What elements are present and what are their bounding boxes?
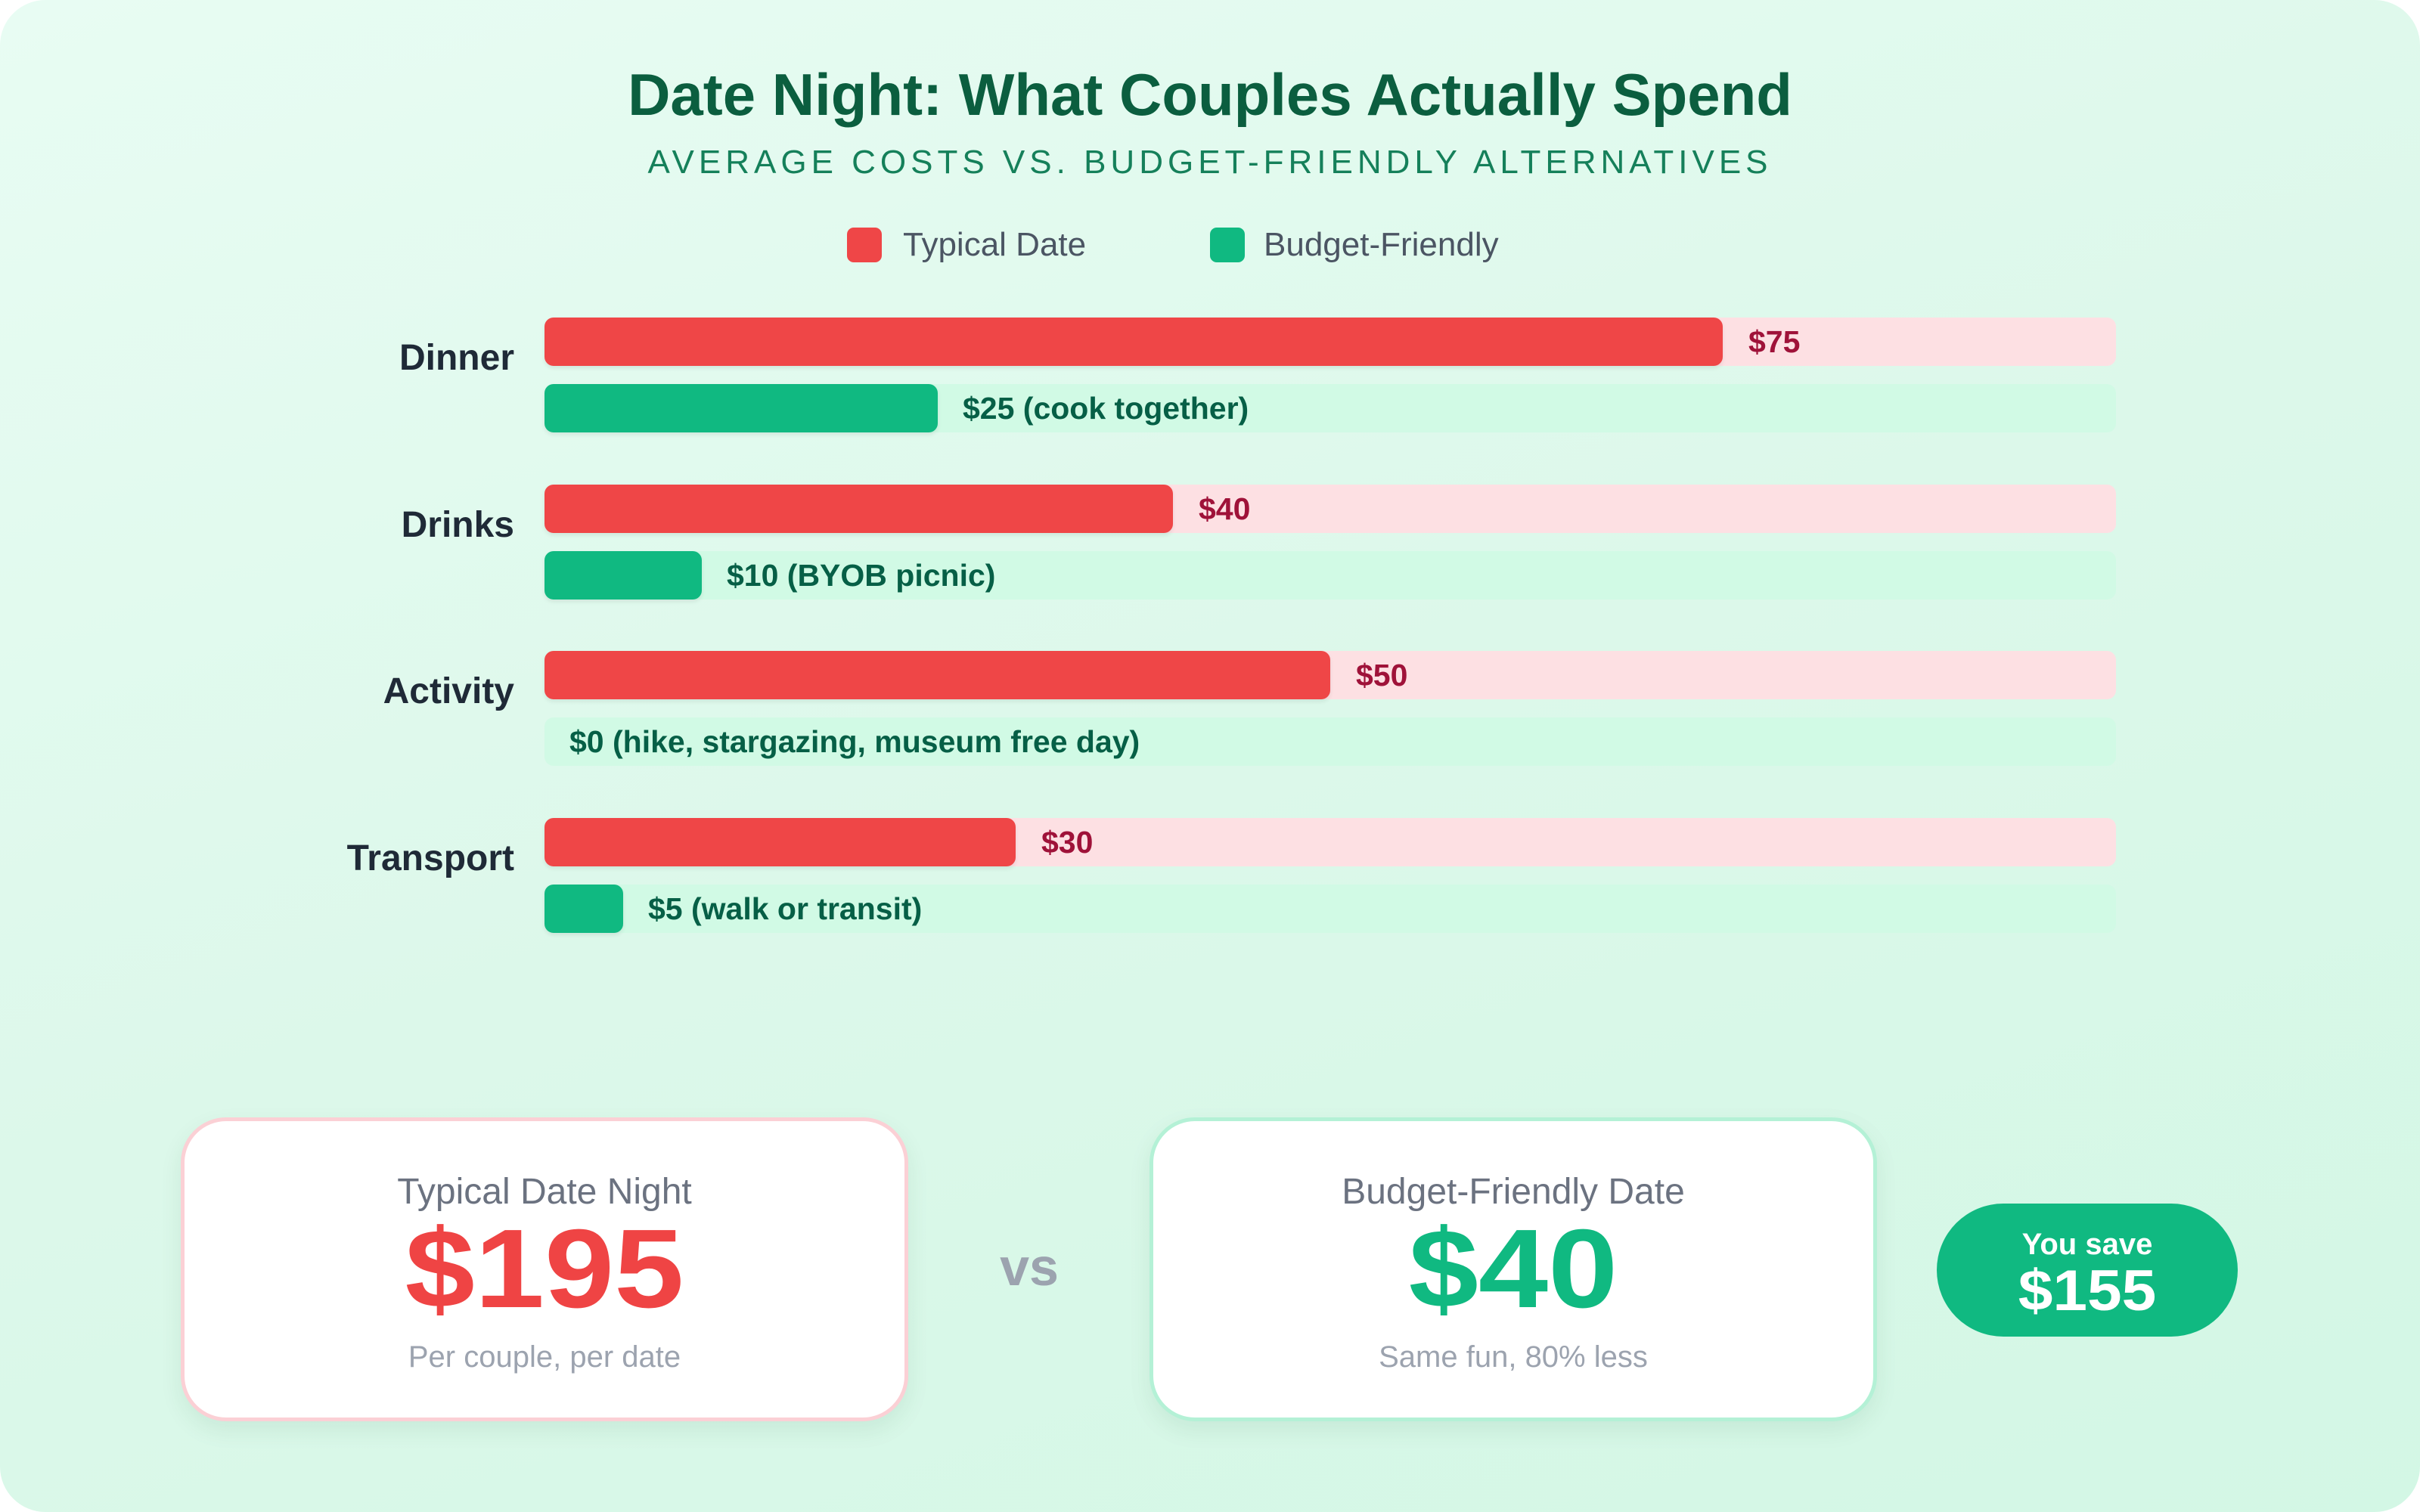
row: drinks: $10 (BYOB picnic) bbox=[727, 558, 995, 593]
row: transport: $5 (walk or transit) bbox=[648, 891, 922, 926]
card: typical date night: $195 bbox=[405, 1207, 684, 1331]
title: Date Night: What Couples Actually Spend bbox=[628, 61, 1792, 128]
legend bbox=[847, 226, 1499, 263]
row: dinner bbox=[399, 318, 2116, 435]
card: typical date night: Per couple, per date bbox=[408, 1340, 681, 1374]
savings pill: You save bbox=[2022, 1228, 2152, 1261]
row: dinner: $75 bbox=[1748, 324, 1800, 359]
row: drinks: $40 bbox=[1199, 491, 1250, 526]
card: typical date night bbox=[181, 1117, 908, 1421]
row: activity: $0 (hike, stargazing, museum free day) bbox=[569, 724, 1140, 759]
legend: budget: Budget-Friendly bbox=[1264, 226, 1499, 263]
legend: typical: Typical Date bbox=[903, 226, 1086, 263]
subtitle: AVERAGE COSTS VS. BUDGET-FRIENDLY ALTERNATIVES bbox=[647, 144, 1773, 181]
row: activity: Activity bbox=[383, 671, 514, 711]
card: budget-friendly date: $40 bbox=[1409, 1207, 1618, 1331]
row: drinks: Drinks bbox=[402, 505, 514, 545]
card: typical date night: Typical Date Night bbox=[397, 1172, 692, 1212]
savings pill: $155 bbox=[2018, 1259, 2156, 1323]
card: budget-friendly date: Same fun, 80% less bbox=[1379, 1340, 1648, 1374]
card: budget-friendly date bbox=[1150, 1117, 1877, 1421]
row: dinner: Dinner bbox=[399, 338, 514, 378]
row: activity: $50 bbox=[1356, 658, 1407, 692]
savings pill bbox=[1937, 1204, 2238, 1337]
row: transport: $30 bbox=[1041, 825, 1093, 860]
bar chart bbox=[347, 318, 2116, 936]
row: drinks bbox=[402, 485, 2116, 602]
card: budget-friendly date: Budget-Friendly Date bbox=[1342, 1172, 1685, 1212]
row: transport: Transport bbox=[347, 838, 514, 878]
row: transport bbox=[347, 818, 2116, 936]
vs label: vs bbox=[1000, 1238, 1059, 1297]
row: activity bbox=[383, 651, 2116, 766]
row: dinner: $25 (cook together) bbox=[963, 391, 1249, 426]
